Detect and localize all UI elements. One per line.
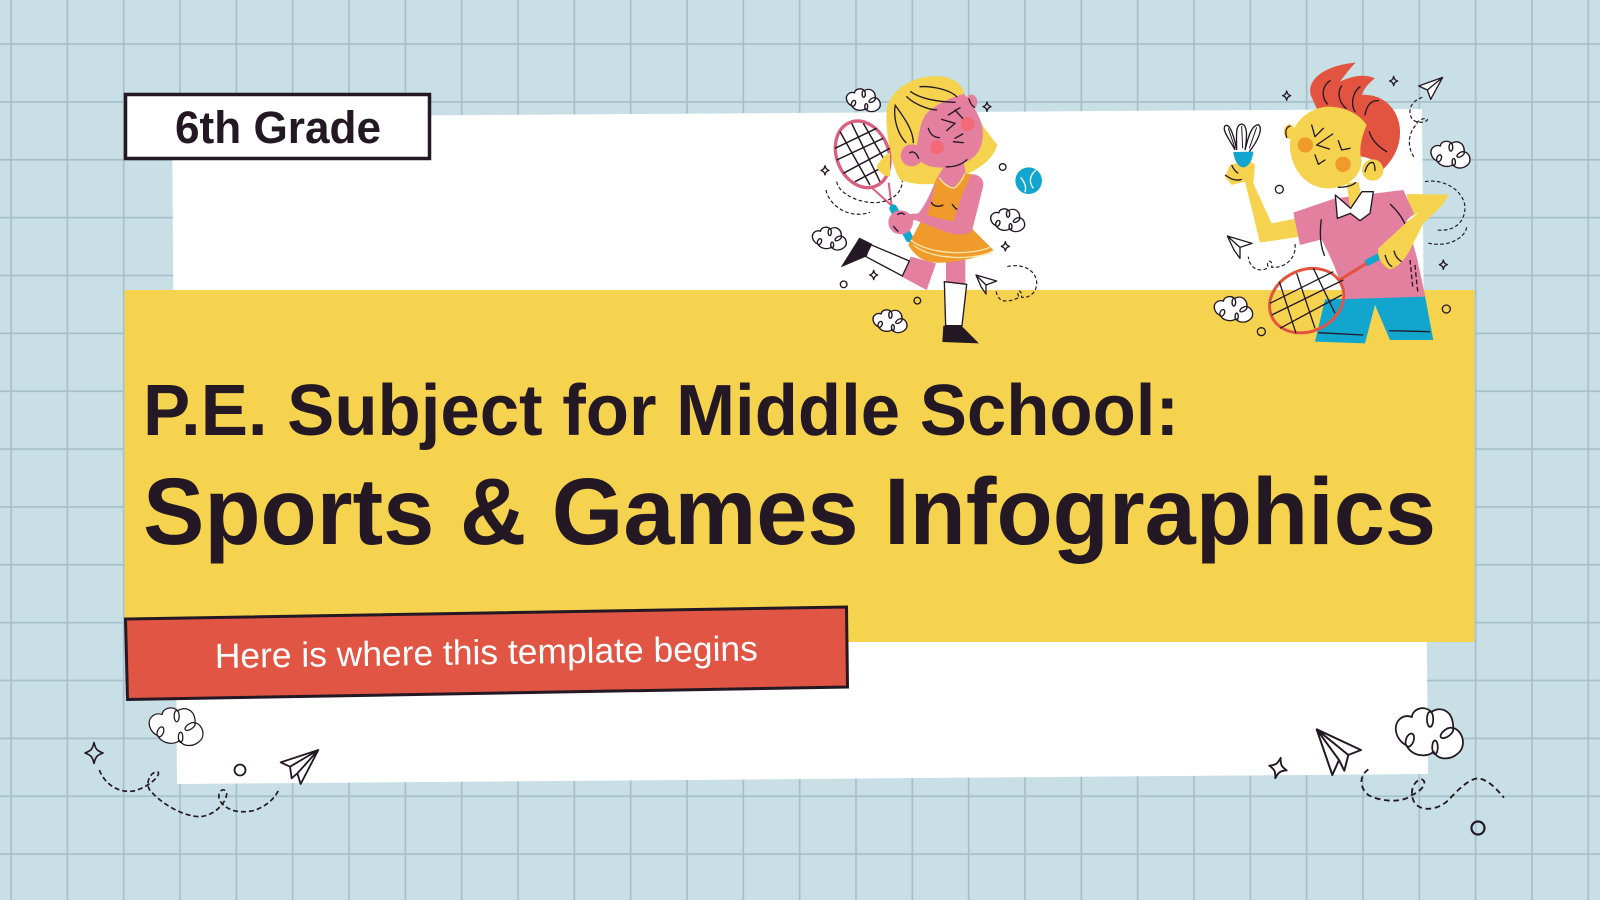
yellow title band bbox=[124, 290, 1474, 642]
circle bottom right bbox=[1472, 822, 1484, 834]
star bottom right bbox=[1267, 756, 1289, 780]
boy: upper right arm bbox=[1407, 194, 1449, 217]
girl: face bbox=[901, 94, 983, 168]
boy: collar bbox=[1335, 192, 1373, 221]
cloud bottom right bbox=[1396, 708, 1463, 758]
doodles bottom left bbox=[85, 708, 318, 817]
grade label: 6th Grade bbox=[175, 102, 381, 153]
star bottom left bbox=[85, 742, 103, 764]
subtitle ribbon: Here is where this template begins bbox=[215, 629, 758, 676]
girl: back hair bbox=[886, 76, 997, 184]
cloud bottom left bbox=[149, 708, 203, 746]
doodles bottom right bbox=[1267, 708, 1504, 834]
grade label bbox=[126, 94, 430, 158]
circle bottom left bbox=[234, 764, 246, 776]
badminton racket bbox=[1259, 247, 1407, 345]
boy: face bbox=[1284, 107, 1383, 188]
white paper panel bbox=[172, 109, 1428, 784]
boy: shirt bbox=[1293, 190, 1425, 299]
girl: hair over racket bbox=[877, 153, 890, 177]
paper plane bottom left bbox=[281, 750, 318, 784]
boy: hair strands bbox=[1323, 81, 1387, 152]
girl: standing leg bbox=[942, 260, 979, 343]
tennis ball bbox=[1015, 167, 1042, 194]
girl: arms and hand bbox=[888, 174, 983, 234]
boy: shorts bbox=[1315, 296, 1433, 343]
girl: bent leg bbox=[841, 238, 936, 290]
boy: hair bbox=[1310, 63, 1400, 171]
shuttlecock bbox=[1224, 124, 1260, 167]
paper plane bottom right bbox=[1317, 729, 1361, 775]
doodle clouds, stars, dashes around girl bbox=[812, 89, 1037, 333]
girl: racket bbox=[826, 113, 909, 238]
boy: neck bbox=[1347, 182, 1362, 208]
boy: forearm and hand on grip bbox=[1378, 195, 1449, 269]
title: P.E. Subject for Middle School: bbox=[143, 371, 1179, 451]
dashed trail bottom left bbox=[99, 770, 279, 817]
doodle clouds, stars, dashes around boy bbox=[1214, 76, 1470, 336]
boy: raised arm and hand bbox=[1225, 160, 1300, 243]
girl: hair strands bbox=[895, 87, 957, 143]
title bbox=[143, 371, 1436, 565]
dashed trail bottom right bbox=[1361, 769, 1504, 809]
title: Sports & Games Infographics bbox=[143, 459, 1436, 565]
illustration: girl with tennis racket bbox=[812, 76, 1042, 343]
girl: neck bbox=[937, 160, 966, 190]
girl: dress bbox=[908, 173, 993, 263]
subtitle ribbon bbox=[126, 607, 848, 700]
illustration: boy with badminton racket bbox=[1214, 63, 1470, 345]
